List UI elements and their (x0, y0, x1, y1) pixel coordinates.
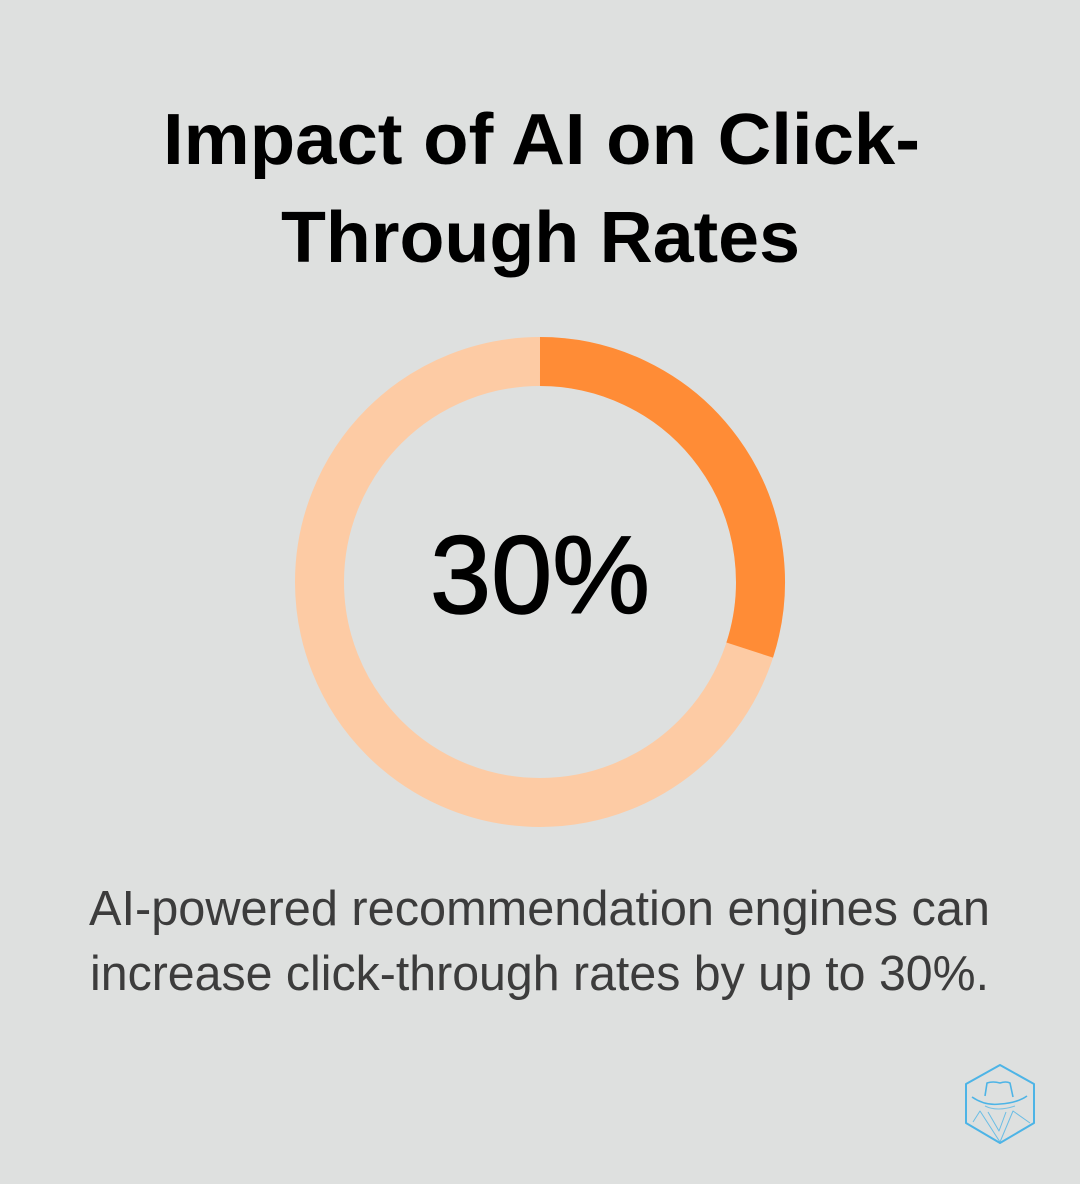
donut value arc (540, 362, 760, 650)
title: Impact of AI on Click- (163, 100, 920, 180)
description text: increase click-through rates by up to 30%. (90, 947, 989, 1001)
title (163, 100, 920, 278)
donut center value: 30% (430, 514, 650, 637)
icon: logo, spy in hat inside hexagon (966, 1065, 1034, 1143)
description text: AI-powered recommendation engines can (89, 882, 990, 936)
title: Through Rates (281, 198, 800, 278)
donut track (320, 362, 760, 802)
description text (89, 882, 990, 1001)
donut chart: 30% (320, 362, 760, 802)
